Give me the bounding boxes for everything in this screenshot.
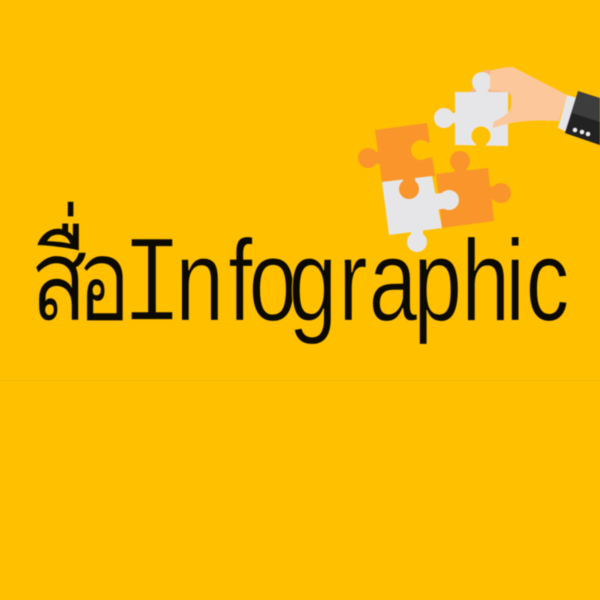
icon: orange puzzle piece top left — [358, 123, 441, 182]
icon: orange puzzle piece right — [434, 151, 511, 228]
icon: hand — [490, 67, 567, 128]
title: nfographic: nfographic — [176, 215, 569, 345]
icon: suit sleeve — [565, 91, 600, 145]
title: Thai word, last letter: อ — [77, 217, 131, 346]
icon: hand fingers behind piece — [470, 70, 510, 95]
icon: orange knob joining pieces — [399, 178, 419, 199]
icon: shirt cuff — [558, 95, 577, 132]
illustration: puzzle and hand — [358, 67, 600, 252]
title — [30, 201, 569, 358]
title: Thai word, first cluster: สื่ — [30, 201, 88, 346]
title: letter I: I — [120, 216, 184, 358]
icon: white puzzle piece lower left — [382, 176, 459, 252]
icon: white puzzle piece held by hand — [434, 72, 508, 148]
